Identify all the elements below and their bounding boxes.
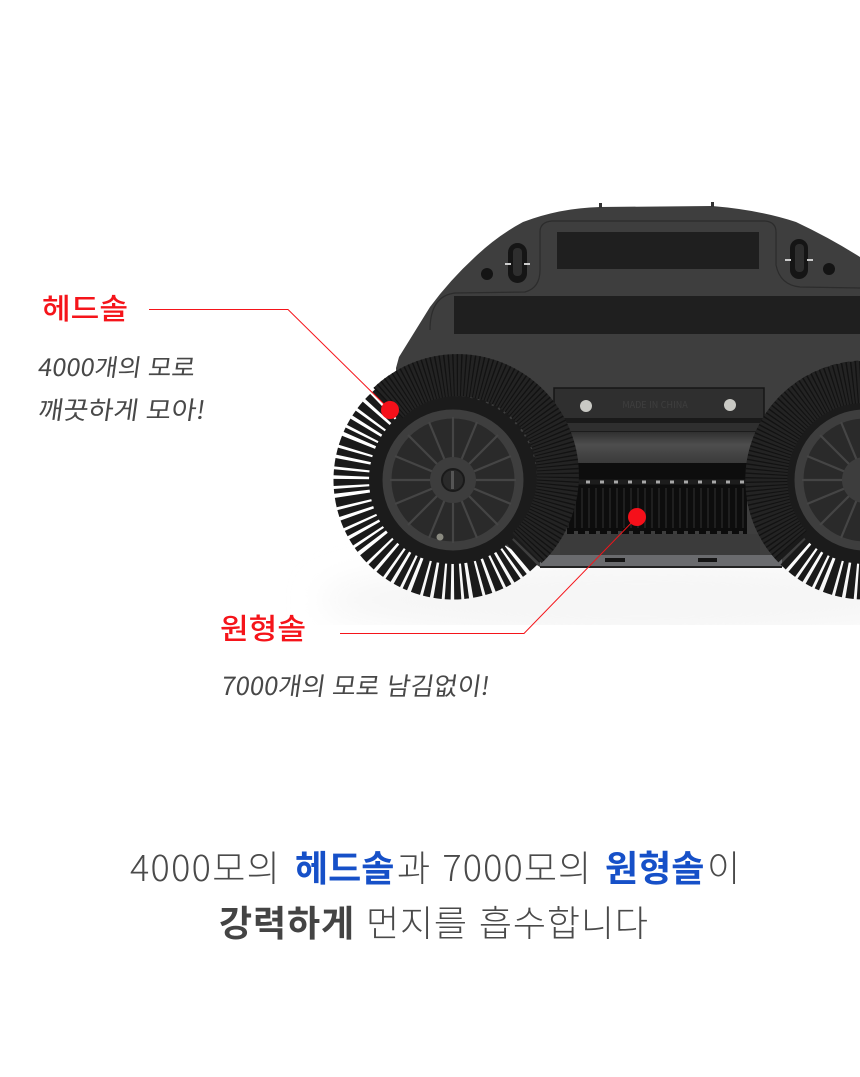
product photo: sweeper underside: [320, 202, 860, 640]
sweeper body: [396, 206, 860, 567]
upper recess outline: [430, 221, 860, 330]
lower deck and grey strip: [540, 534, 782, 568]
left caster wheel: [505, 243, 530, 283]
caption line 2: 강력하게 먼지를 흡수합니다: [219, 895, 648, 947]
leader line: round brush: [340, 517, 637, 634]
right brush hub: [799, 414, 860, 546]
handwritten note: head brush: 깨끗하게 모아!: [36, 391, 208, 427]
right head brush: [765, 380, 860, 580]
velcro strip: lower: [454, 296, 860, 334]
rubber flap: [563, 432, 760, 464]
screw holes: [481, 263, 835, 280]
handwritten note: head brush: [30, 348, 214, 427]
heading: round brush: 원형솔: [220, 606, 306, 648]
caption line 1: 헤드솔: [295, 840, 394, 892]
velcro strip: upper: [557, 232, 759, 269]
caption line 1: 이: [707, 840, 740, 892]
heading: head brush: 헤드솔: [42, 286, 128, 328]
caption line 1: 원형솔: [605, 840, 704, 892]
handwritten note: head brush: 4000개의 모로: [36, 348, 198, 383]
caption line 1: 과 7000모의: [397, 840, 592, 892]
floor shadow: [396, 580, 860, 620]
left head brush: [353, 375, 558, 580]
hinge plate: [554, 388, 764, 432]
left brush hub: [387, 414, 519, 546]
caption line 1: 4000모의: [130, 840, 281, 892]
right caster wheel: [785, 239, 813, 279]
top bumps: [599, 202, 714, 208]
summary caption: [130, 840, 740, 947]
callout: round brush: [219, 508, 646, 703]
leader line: head brush: [149, 310, 390, 410]
marker: head brush: [381, 401, 399, 419]
hinge plate: MADE IN CHINA: [622, 398, 688, 411]
marker: round brush: [628, 508, 646, 526]
handwritten note: round brush: 7000개의 모로 남김없이!: [219, 667, 492, 703]
callout: head brush: [30, 286, 399, 427]
centre roller brush: [530, 463, 785, 531]
